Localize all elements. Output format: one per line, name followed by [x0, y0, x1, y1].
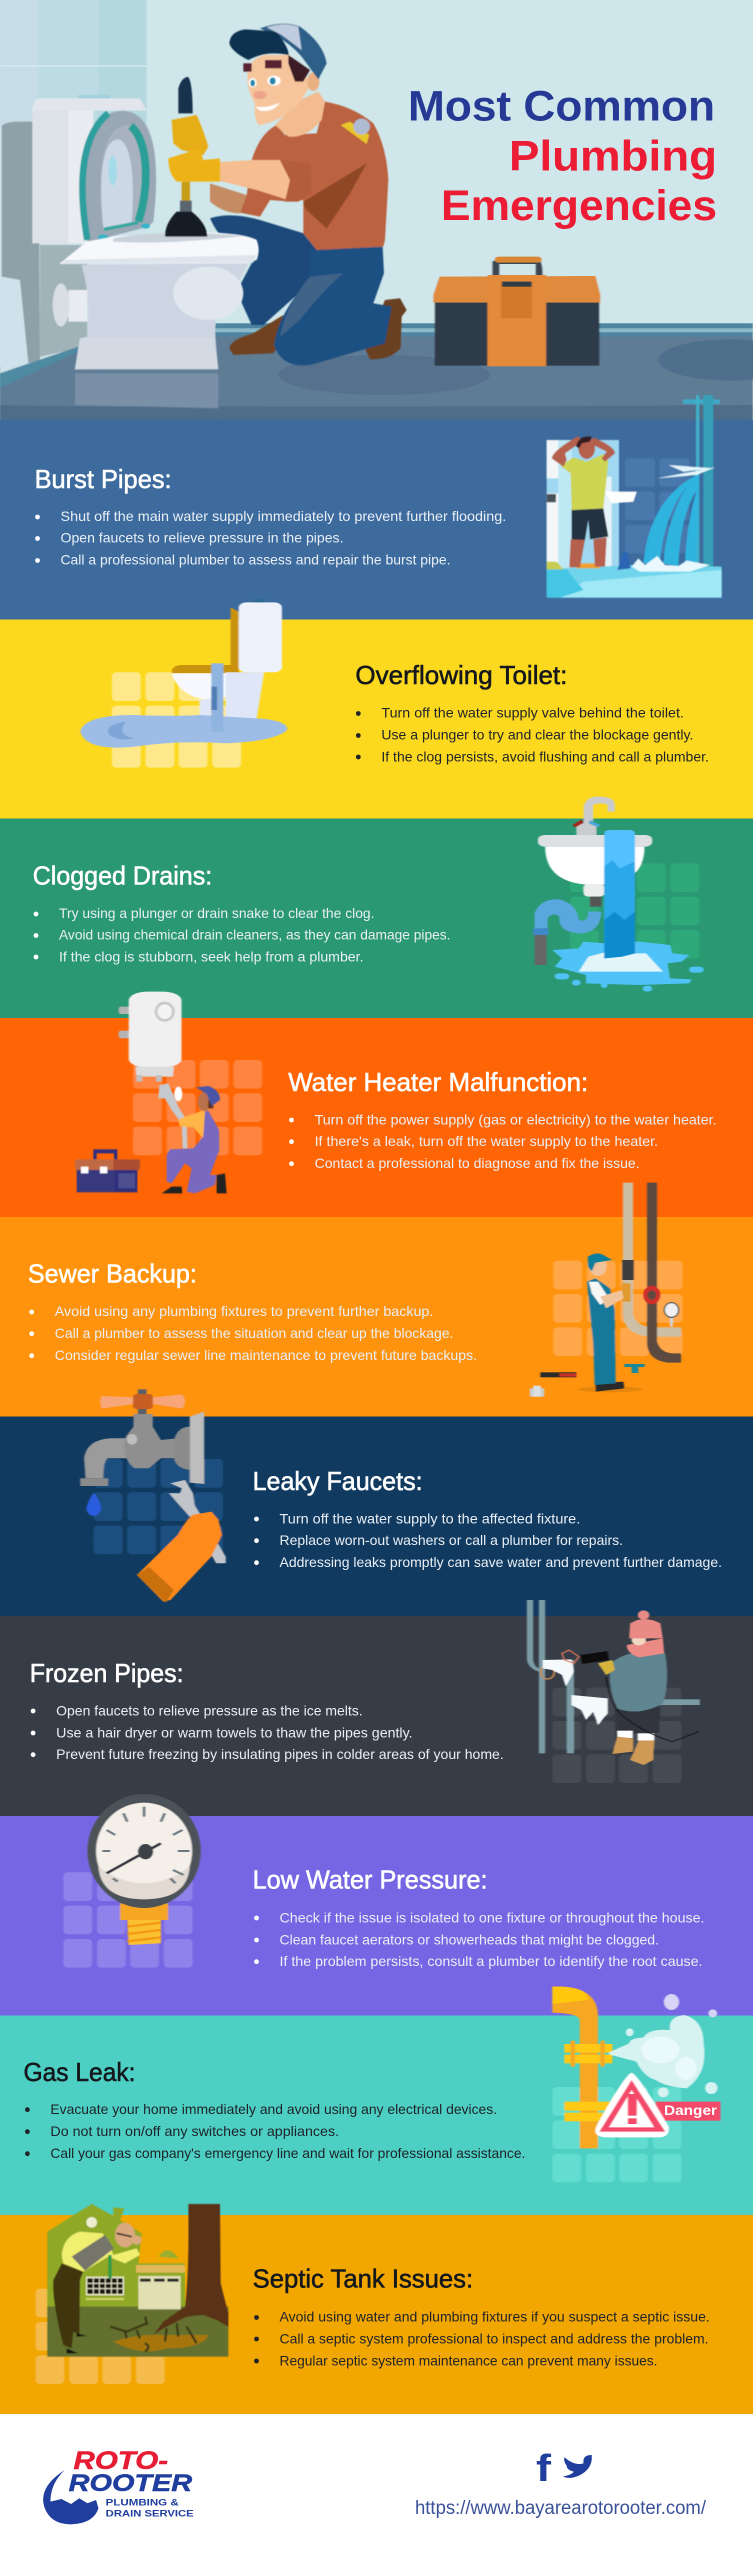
panel: frozen pipes	[0, 1600, 753, 1816]
panel background	[0, 1416, 753, 1616]
bullet list: Do not turn on/off any switches or appliances.	[50, 2124, 339, 2139]
title: Most Common	[408, 83, 715, 131]
panel: overflowing toilet	[0, 599, 753, 818]
panel: clogged drains	[0, 797, 753, 1018]
bullet list: Open faucets to relieve pressure in the pipes.	[60, 531, 344, 546]
panel: gas leak	[0, 1987, 753, 2215]
panel: leaky faucets	[0, 1389, 753, 1616]
bullet list	[254, 1910, 704, 1969]
illustration: water heater tank	[119, 992, 262, 1155]
logo water mark	[43, 2470, 98, 2524]
bullet list: Turn off the water supply to the affected fixture.	[280, 1511, 580, 1526]
bullet list: Call a plumber to assess the situation and clear up the blockage.	[55, 1326, 453, 1341]
bullet list	[356, 706, 709, 764]
bullet list: Call a professional plumber to assess and repair the burst pipe.	[60, 553, 450, 568]
illustration: toilet and plunger	[0, 77, 259, 420]
bullet list: Clean faucet aerators or showerheads that might be clogged.	[280, 1932, 659, 1947]
icon: facebook: f	[536, 2448, 551, 2490]
panel: sewer backup	[0, 1183, 753, 1416]
bullet list: Consider regular sewer line maintenance to prevent future backups.	[55, 1348, 477, 1363]
icon: twitter	[563, 2455, 592, 2478]
heading: Overflowing Toilet:	[355, 660, 567, 690]
bullet list: Prevent future freezing by insulating pipes in colder areas of your home.	[56, 1747, 504, 1762]
heading: Septic Tank Issues:	[253, 2264, 473, 2294]
bullet list: Avoid using any plumbing fixtures to prevent further backup.	[55, 1304, 433, 1319]
bullet list	[289, 1112, 717, 1171]
bullet list: Contact a professional to diagnose and fix the issue.	[315, 1156, 640, 1171]
heading: Frozen Pipes:	[30, 1658, 183, 1688]
heading: Low Water Pressure:	[253, 1865, 488, 1895]
bullet list: Turn off the power supply (gas or electricity) to the water heater.	[315, 1112, 717, 1127]
bullet list: Regular septic system maintenance can prevent many issues.	[280, 2353, 658, 2368]
logo: Roto-Rooter	[43, 2447, 194, 2524]
logo: Roto-Rooter: ROTO-	[74, 2447, 168, 2475]
bullet list: Evacuate your home immediately and avoid using any electrical devices.	[50, 2102, 497, 2117]
bullet list: Use a hair dryer or warm towels to thaw the pipes gently.	[56, 1725, 413, 1740]
logo: Roto-Rooter: ROOTER	[69, 2470, 193, 2497]
panel: hero header	[0, 0, 753, 427]
bullet list: Try using a plunger or drain snake to clear the clog.	[59, 906, 374, 921]
panel: low water pressure	[0, 1794, 753, 2016]
bullet list: Addressing leaks promptly can save water and prevent further damage.	[280, 1555, 722, 1570]
bullet list: Turn off the water supply valve behind the toilet.	[381, 706, 684, 721]
bullet list: Avoid using chemical drain cleaners, as they can damage pipes.	[59, 928, 450, 943]
bullet list	[34, 906, 450, 965]
panel background	[0, 620, 753, 818]
bullet list: Shut off the main water supply immediately to prevent further flooding.	[60, 509, 506, 524]
bullet list: Call a septic system professional to inspect and address the problem.	[280, 2331, 708, 2346]
illustration: tiles behind septic scene	[36, 2289, 165, 2384]
bullet list	[254, 1511, 722, 1570]
illustration: man and burst pipe	[547, 395, 722, 598]
illustration: thawing frozen pipes	[527, 1600, 700, 1783]
danger label: Danger	[664, 2102, 718, 2118]
bullet list: If the clog is stubborn, seek help from a plumber.	[59, 950, 364, 965]
heading: Burst Pipes:	[35, 464, 172, 494]
illustration: plumber	[210, 24, 407, 365]
website url: https://www.bayarearotorooter.com/	[415, 2498, 707, 2519]
illustration: faucet and wrench	[80, 1389, 226, 1603]
illustration: septic tank house scene	[47, 2204, 228, 2357]
hero background: wall, skirting and floor with toolbox	[0, 0, 753, 427]
bullet list	[35, 509, 506, 568]
bullet list: Open faucets to relieve pressure as the ice melts.	[56, 1703, 363, 1718]
illustration: plumber at pipes	[530, 1183, 683, 1397]
bullet list	[31, 1703, 504, 1762]
title: Plumbing	[509, 133, 717, 181]
footer background	[0, 2414, 753, 2560]
panel background	[0, 420, 753, 620]
panel: burst pipes	[0, 395, 753, 620]
bullet list: Check if the issue is isolated to one fixture or throughout the house.	[280, 1910, 704, 1925]
bullet list: If the clog persists, avoid flushing and call a plumber.	[381, 749, 709, 764]
bullet list: Call your gas company's emergency line and wait for professional assistance.	[50, 2146, 525, 2161]
title: Emergencies	[441, 182, 717, 230]
panel: footer	[0, 2414, 753, 2560]
bullet list	[25, 2102, 525, 2161]
bullet list: Avoid using water and plumbing fixtures if you suspect a septic issue.	[280, 2310, 710, 2325]
heading: Leaky Faucets:	[253, 1466, 423, 1496]
panel background	[0, 818, 753, 1018]
bullet list: If there's a leak, turn off the water supply to the heater.	[315, 1134, 658, 1149]
logo: Roto-Rooter: DRAIN SERVICE	[106, 2508, 194, 2519]
logo: Roto-Rooter: PLUMBING &	[106, 2498, 179, 2509]
heading: Gas Leak:	[24, 2057, 136, 2087]
heading: Sewer Backup:	[28, 1259, 197, 1289]
illustration: overflowing toilet	[80, 599, 287, 768]
bullet list	[29, 1304, 477, 1363]
illustration: overflowing sink	[533, 797, 704, 992]
panel background	[0, 2215, 753, 2414]
illustration: gas pipe leak and danger sign	[552, 1987, 720, 2182]
bullet list: Use a plunger to try and clear the blockage gently.	[381, 727, 693, 742]
panel background	[0, 1018, 753, 1217]
panel background	[0, 1616, 753, 1816]
illustration: repairman and toolbox	[75, 1083, 227, 1193]
bullet list: If the problem persists, consult a plumber to identify the root cause.	[280, 1954, 702, 1969]
panel: water heater malfunction	[0, 992, 753, 1217]
panel: septic tank issues	[0, 2204, 753, 2414]
panel background	[0, 1217, 753, 1416]
panel background	[0, 2016, 753, 2215]
heading: Water Heater Malfunction:	[288, 1067, 588, 1097]
toolbox	[492, 257, 543, 275]
illustration: pressure gauge	[63, 1794, 201, 1968]
title	[408, 83, 717, 230]
heading: Clogged Drains:	[33, 860, 212, 890]
bullet list: Replace worn-out washers or call a plumber for repairs.	[280, 1533, 623, 1548]
bullet list	[254, 2310, 710, 2368]
panel background	[0, 1816, 753, 2016]
